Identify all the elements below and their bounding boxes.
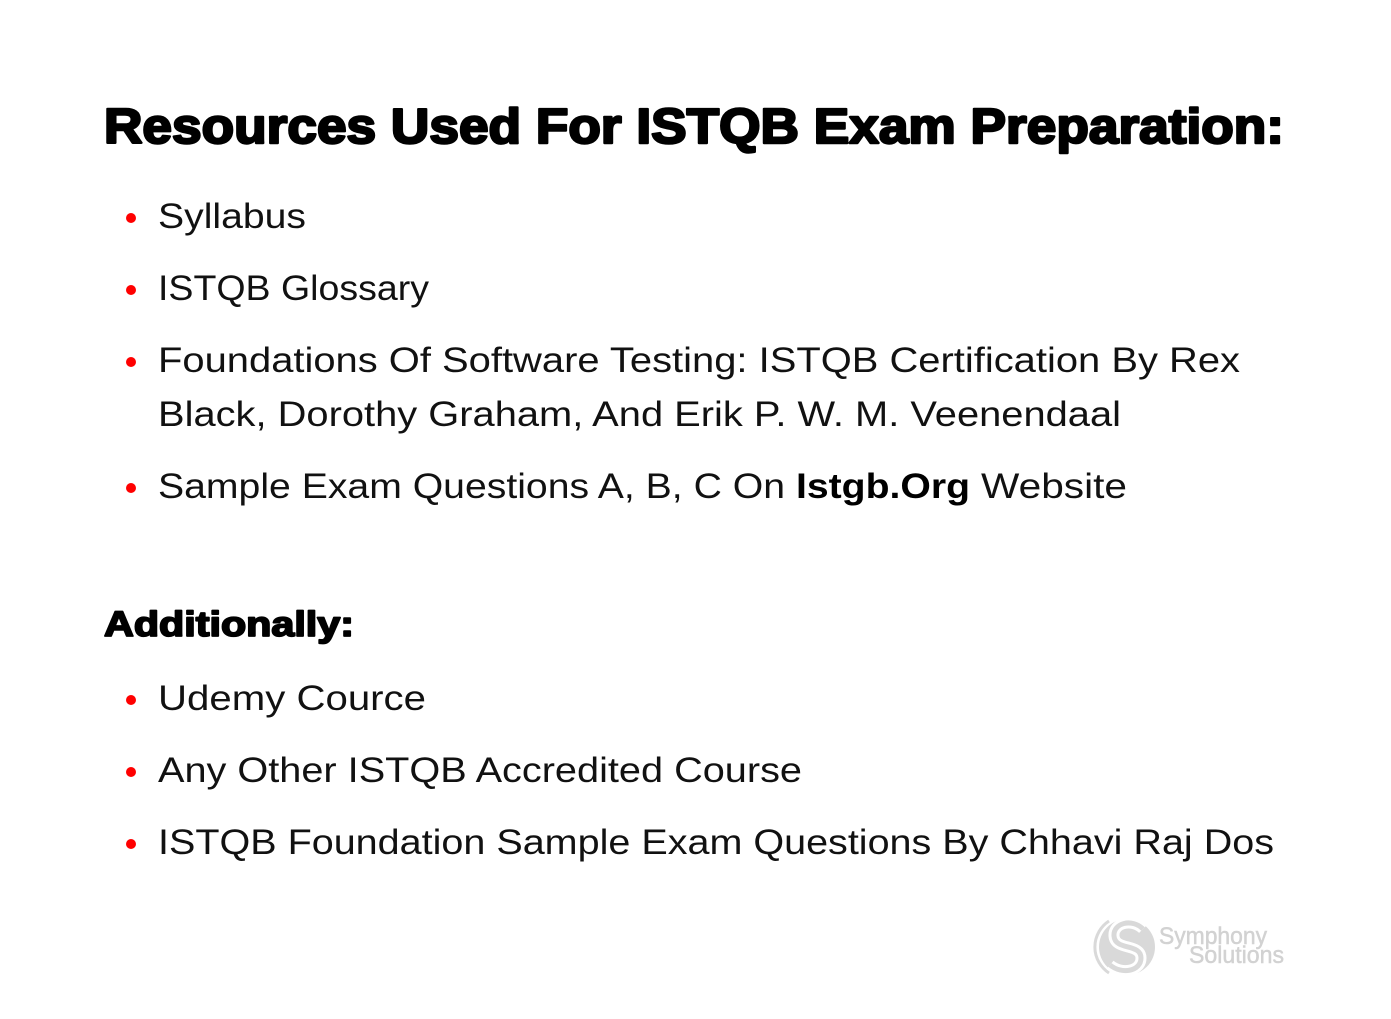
bullet item: sample exam questions: Website (981, 467, 1127, 506)
logo: Symphony Solutions (1095, 919, 1284, 975)
logo: Symphony Solutions: Solutions (1189, 942, 1284, 969)
subheading: additionally: Additionally: (104, 605, 354, 644)
bullet item: foundations book: Foundations Of Software Testing: ISTQB Certification By Rex (158, 341, 1241, 380)
bullet item: glossary: ISTQB Glossary (158, 269, 430, 308)
icon: swirl mark (1095, 919, 1155, 975)
bullet item: foundation sample questions: ISTQB Foundation Sample Exam Questions By Chhavi Raj Dos (158, 823, 1274, 862)
logo wordmark: Symphony (1159, 923, 1267, 950)
list: additional resources (126, 679, 1274, 862)
bullet item: sample exam questions: Istgb.Org (796, 467, 970, 506)
bullet item: sample exam questions (126, 467, 1127, 506)
bullet item: accredited course: Any Other ISTQB Accredited Course (158, 751, 802, 790)
bullet item: syllabus: Syllabus (158, 197, 306, 236)
bullet item: udemy: Udemy Cource (158, 679, 426, 718)
bullet item: foundations book: Black, Dorothy Graham, And Erik P. W. M. Veenendaal (158, 395, 1121, 434)
bullet item: foundations book (126, 341, 1241, 434)
list: main resources (126, 197, 1241, 506)
bullet item: sample exam questions: Sample Exam Questions A, B, C On (158, 467, 785, 506)
title: Resources Used For ISTQB Exam Preparation: (104, 100, 1284, 154)
